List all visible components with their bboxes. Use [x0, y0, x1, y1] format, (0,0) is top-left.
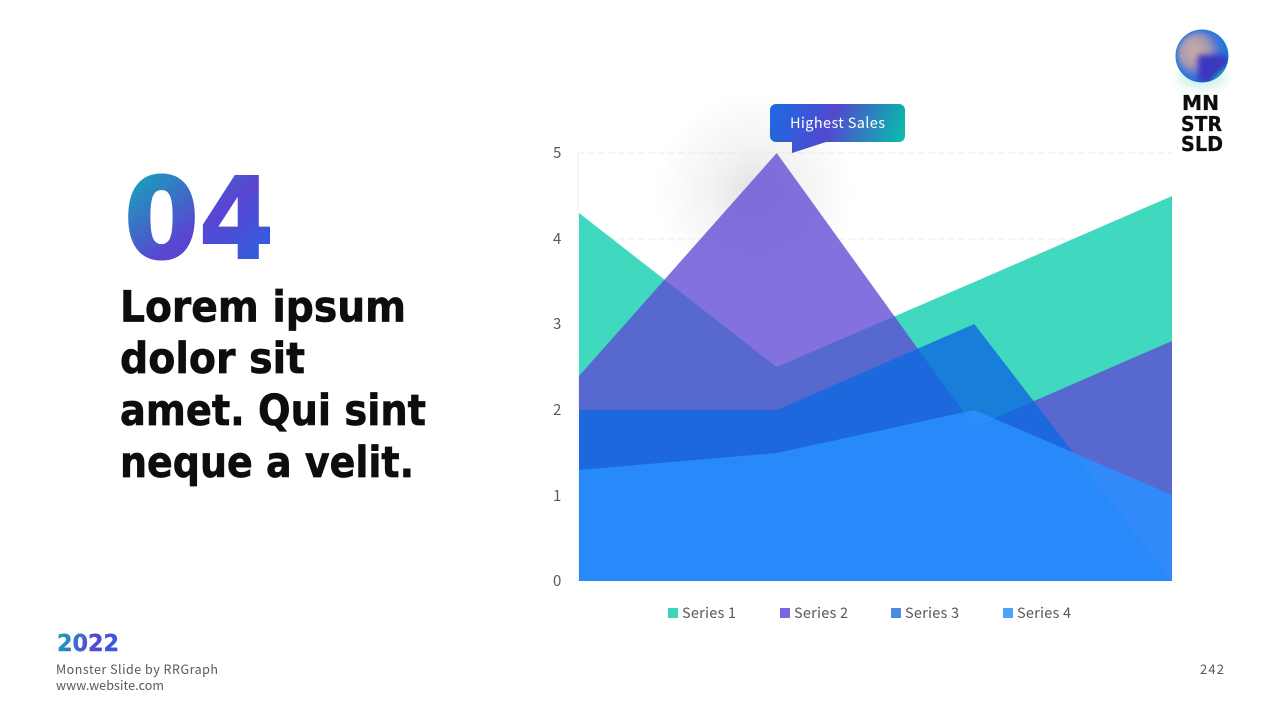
footer: year and credits: Monster Slide by RRGraph — [56, 659, 218, 678]
area chart — [553, 92, 1172, 623]
logo text: STR — [1181, 112, 1222, 136]
heading — [120, 282, 426, 488]
icon: gradient sphere — [1176, 30, 1231, 89]
legend: Series 4 — [1017, 602, 1071, 623]
legend — [668, 602, 1071, 623]
footer: year and credits — [56, 631, 218, 694]
logo — [1176, 30, 1231, 156]
logo text — [1181, 91, 1223, 156]
y axis labels: 5 — [553, 142, 561, 163]
footer: year and credits: www.website.com — [56, 675, 164, 694]
heading: dolor sit — [120, 334, 305, 384]
y axis labels: 4 — [553, 228, 561, 249]
series 4 area — [579, 410, 1172, 581]
section number: 04 — [124, 155, 274, 285]
heading: Lorem ipsum — [120, 282, 406, 332]
callout: highest sales: Highest Sales — [790, 112, 885, 133]
logo text: SLD — [1181, 132, 1223, 156]
page number: 242 — [1200, 659, 1224, 678]
series 2 area — [579, 153, 1172, 581]
heading: neque a velit. — [120, 438, 414, 488]
callout: highest sales — [770, 104, 905, 153]
y axis labels: 2 — [553, 399, 561, 420]
series 3 area — [579, 324, 1172, 581]
y axis labels: 0 — [553, 570, 561, 591]
series 1 area — [579, 196, 1172, 581]
footer: year and credits: 2022 — [57, 631, 119, 657]
logo text: MN — [1182, 91, 1219, 115]
heading: amet. Qui sint — [120, 386, 426, 436]
peak glow — [655, 92, 855, 292]
y axis labels: 3 — [553, 313, 561, 334]
y axis labels: 1 — [553, 485, 561, 506]
y axis labels — [553, 142, 561, 591]
legend: Series 2 — [794, 602, 848, 623]
legend: Series 3 — [905, 602, 959, 623]
legend: Series 1 — [682, 602, 736, 623]
